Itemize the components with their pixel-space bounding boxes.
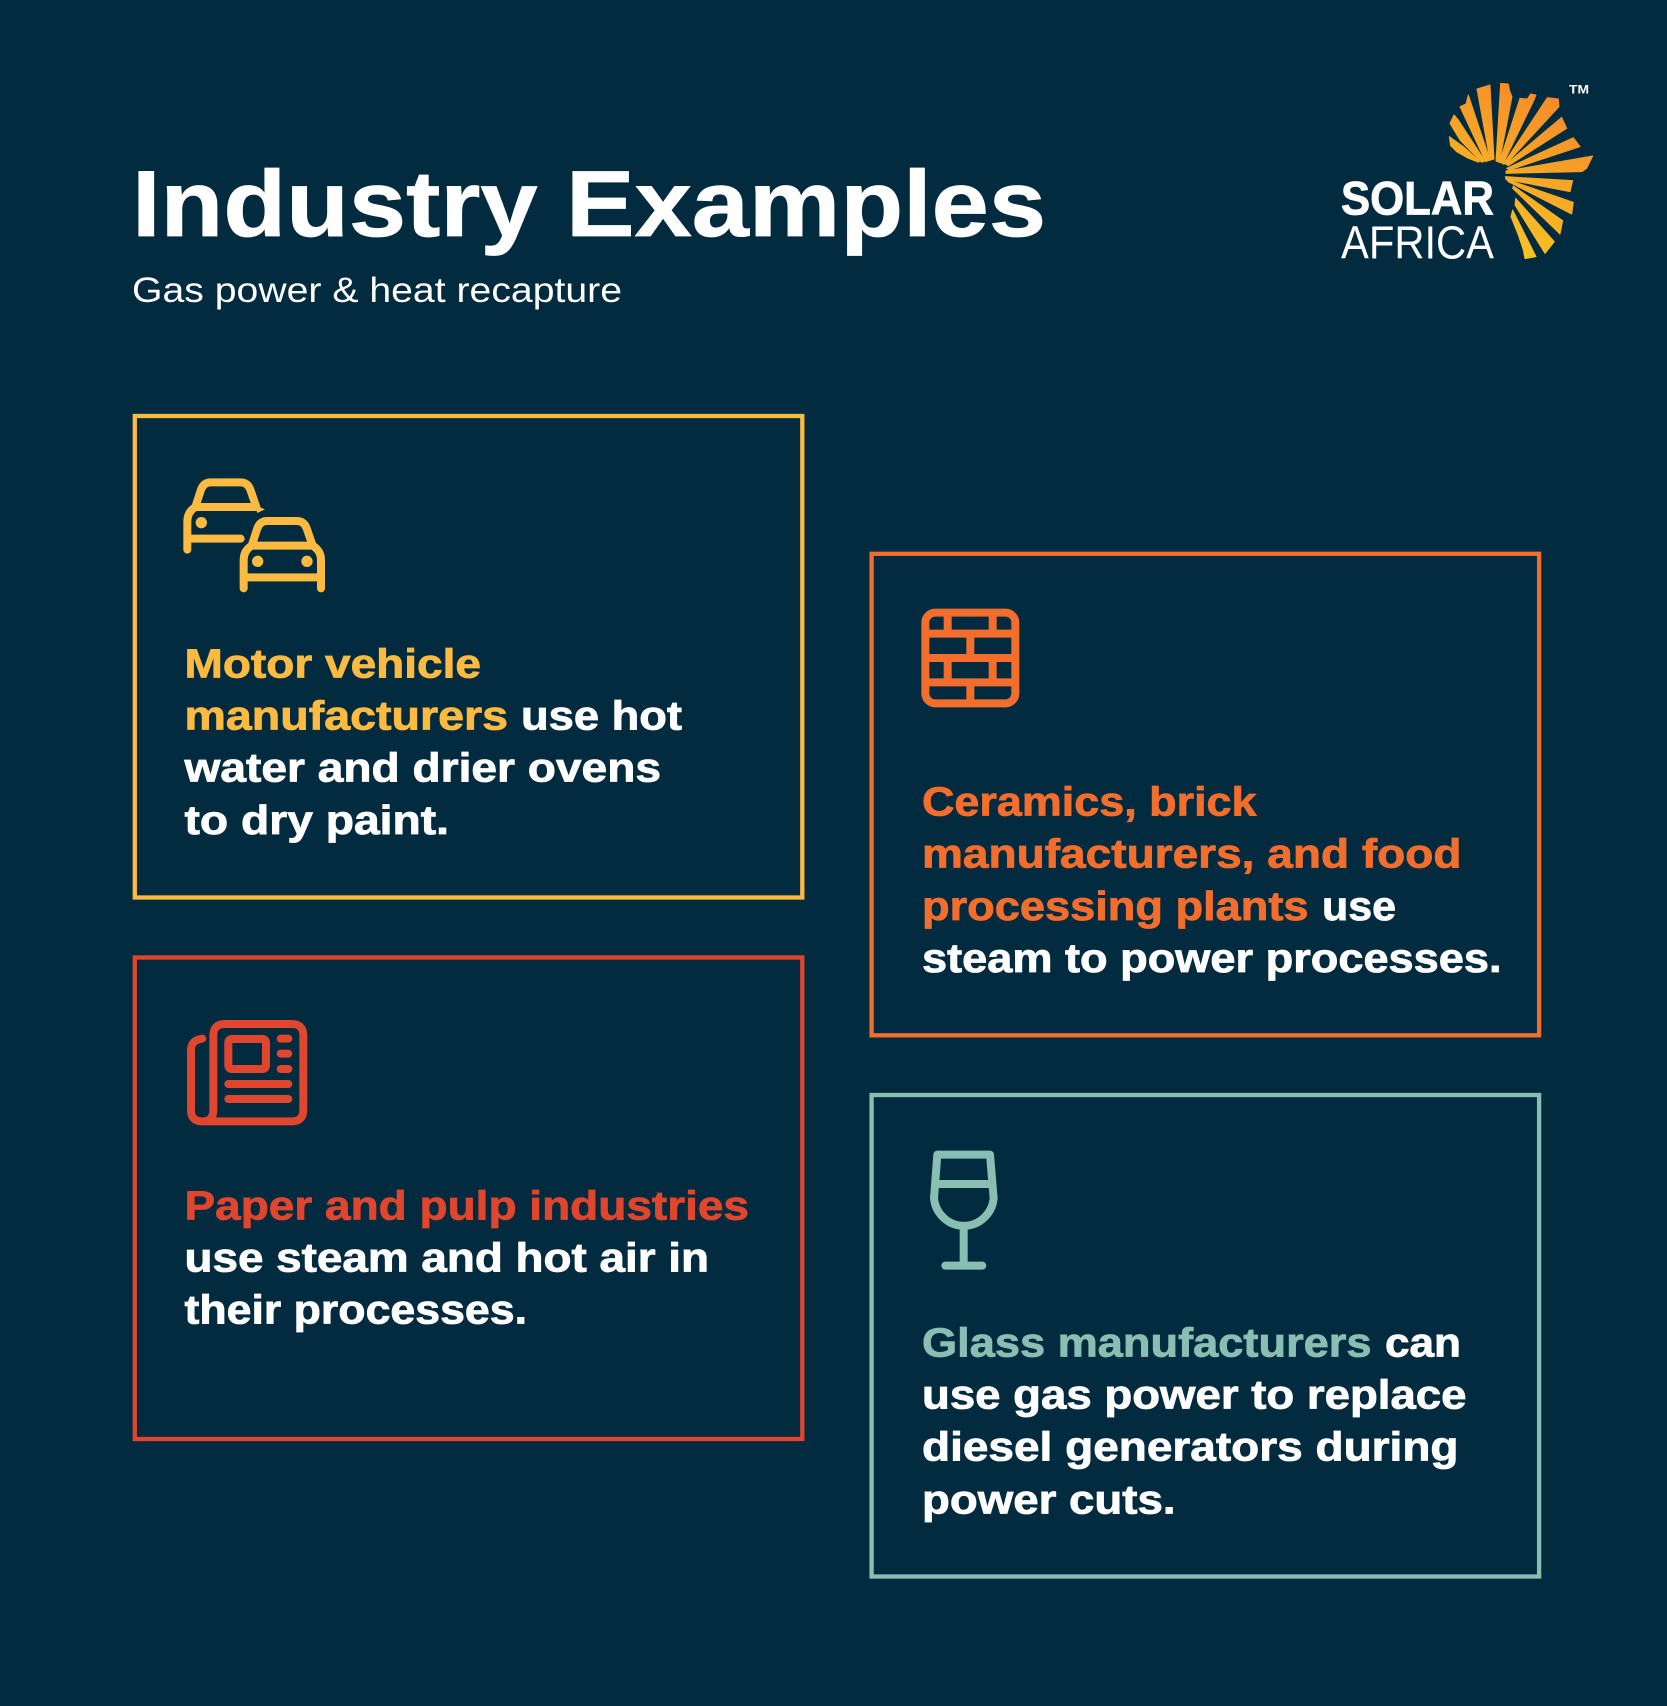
panel: glass manufacturers bbox=[872, 1095, 1539, 1576]
text: motor vehicle: Motor vehicle bbox=[184, 640, 481, 686]
title: Industry Examples bbox=[132, 151, 1046, 256]
logo wordmark bbox=[1341, 82, 1589, 268]
text: motor vehicle: to dry paint. bbox=[184, 797, 449, 843]
text: ceramics and brick: manufacturers, and food bbox=[922, 830, 1462, 876]
text: glass manufacturers: Glass manufacturers bbox=[922, 1320, 1372, 1366]
text: ceramics and brick: steam to power processes. bbox=[922, 935, 1502, 981]
text: glass manufacturers: can bbox=[1385, 1320, 1461, 1366]
text: glass manufacturers: use gas power to replace bbox=[922, 1372, 1466, 1418]
text: motor vehicle bbox=[183, 640, 682, 843]
text: paper and pulp: use steam and hot air in bbox=[184, 1234, 709, 1280]
text: glass manufacturers bbox=[922, 1320, 1466, 1522]
logo: Solar Africa bbox=[1341, 82, 1593, 268]
text: ceramics and brick: use bbox=[1322, 883, 1396, 929]
logo wordmark: AFRICA bbox=[1341, 216, 1494, 268]
logo: Africa sun rays bbox=[1449, 83, 1593, 259]
icon: brick wall bbox=[925, 613, 1015, 703]
logo wordmark: SOLAR bbox=[1341, 172, 1494, 224]
text: motor vehicle: manufacturers bbox=[184, 692, 508, 738]
logo wordmark: TM bbox=[1569, 82, 1589, 96]
text: ceramics and brick bbox=[922, 778, 1502, 981]
icon: newspaper bbox=[191, 1024, 303, 1121]
text: paper and pulp: their processes. bbox=[184, 1286, 527, 1332]
text: motor vehicle: use hot bbox=[521, 692, 682, 738]
icon: wine glass bbox=[934, 1155, 994, 1266]
subtitle: Gas power & heat recapture bbox=[132, 271, 622, 310]
text: glass manufacturers: power cuts. bbox=[922, 1476, 1176, 1522]
text: ceramics and brick: processing plants bbox=[922, 883, 1308, 929]
icon: two cars bbox=[187, 482, 321, 588]
text: motor vehicle: water and drier ovens bbox=[183, 744, 661, 790]
text: paper and pulp bbox=[184, 1182, 749, 1332]
text: glass manufacturers: diesel generators during bbox=[922, 1424, 1458, 1470]
panel: ceramics and brick bbox=[872, 554, 1539, 1035]
panel: motor vehicle manufacturers bbox=[135, 416, 802, 898]
panel: paper and pulp bbox=[135, 958, 802, 1439]
text: ceramics and brick: Ceramics, brick bbox=[922, 778, 1257, 824]
text: paper and pulp: Paper and pulp industries bbox=[184, 1182, 749, 1228]
